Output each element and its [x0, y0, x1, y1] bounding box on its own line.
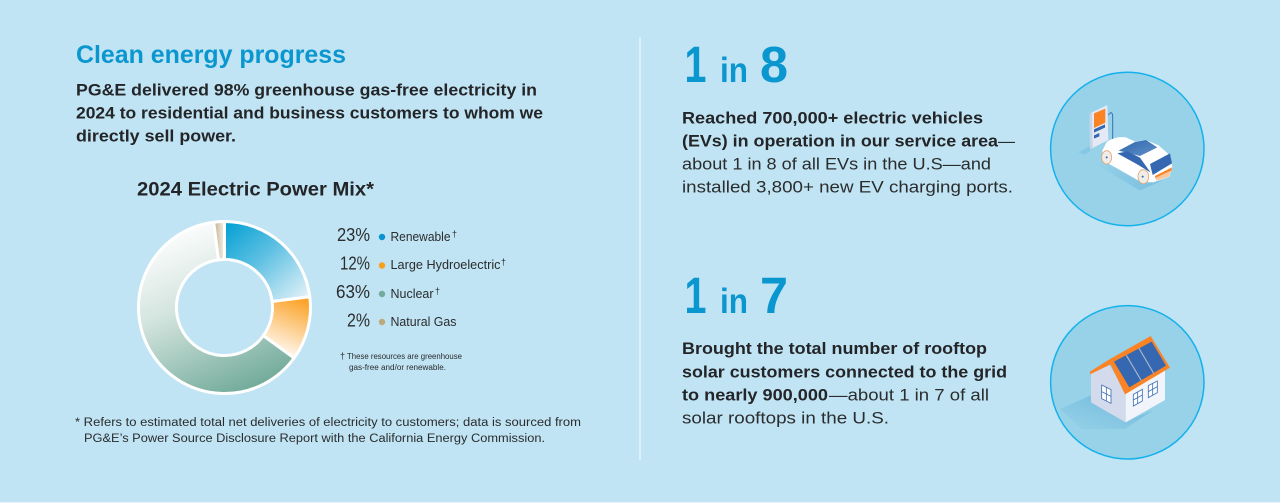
legend item: large hydroelectric: †: [501, 257, 506, 267]
EV text block: about 1 in 8 of all EVs in the U.S—and: [682, 154, 991, 174]
solar text block: [682, 339, 1007, 428]
intro text: directly sell power.: [76, 126, 236, 146]
heading: Clean energy progress: [76, 41, 346, 69]
legend item: renewable: †: [452, 229, 457, 239]
solar text block: solar customers connected to the grid: [682, 362, 1007, 382]
legend item: nuclear: †: [435, 286, 440, 296]
chart title: 2024 Electric Power Mix*: [137, 180, 375, 200]
legend item: nuclear: [336, 282, 440, 302]
legend footnote: †: [340, 351, 345, 361]
statistic: 1 in 8: 8: [760, 36, 788, 93]
statistic: 1 in 7: 1: [684, 267, 706, 324]
statistic: 1 in 7: 7: [760, 267, 788, 324]
legend item: natural gas: [347, 310, 456, 330]
statistic: 1 in 7: [684, 267, 788, 324]
legend item: natural gas: Natural Gas: [390, 315, 456, 329]
legend item: large hydroelectric: 12%: [340, 254, 370, 274]
panel: rooftop solar: [682, 267, 1204, 459]
statistic: 1 in 8: [684, 36, 788, 93]
panel: clean energy progress: [75, 41, 581, 445]
legend item: nuclear: 63%: [336, 282, 370, 302]
donut chart: electric power mix: [139, 222, 310, 394]
data source note: PG&E’s Power Source Disclosure Report with the California Energy Commission.: [84, 433, 545, 445]
legend footnote: These resources are greenhouse: [347, 352, 463, 361]
statistic: 1 in 8: 1: [684, 36, 706, 93]
segment: nuclear 63%: [139, 222, 294, 394]
intro text: [76, 80, 543, 146]
legend item: large hydroelectric: [340, 254, 506, 274]
legend item: natural gas: 2%: [347, 310, 370, 330]
legend footnote: [340, 351, 463, 372]
icon: house with solar panels: [1051, 306, 1204, 459]
solar text block: —about 1 in 7 of all: [829, 386, 989, 404]
EV text block: installed 3,800+ new EV charging ports.: [682, 178, 1013, 196]
solar text block: to nearly 900,000: [682, 386, 828, 404]
statistic: 1 in 8: in: [720, 51, 748, 90]
solar text block: solar rooftops in the U.S.: [682, 408, 889, 428]
legend item: large hydroelectric: Large Hydroelectric: [390, 258, 500, 272]
legend footnote: gas-free and/or renewable.: [349, 363, 446, 372]
segment: large hydroelectric 12%: [263, 297, 310, 358]
intro text: PG&E delivered 98% greenhouse gas-free electricity in: [76, 80, 537, 100]
panel: electric vehicles: [682, 36, 1204, 226]
segment: renewable 23%: [224, 222, 310, 302]
statistic: 1 in 7: in: [720, 282, 748, 321]
data source note: * Refers to estimated total net deliveries of electricity to customers; data is sourced from: [75, 417, 581, 429]
EV text block: —: [998, 132, 1015, 150]
EV text block: (EVs) in operation in our service area: [682, 132, 999, 150]
legend: [336, 225, 506, 330]
EV text block: Reached 700,000+ electric vehicles: [682, 108, 983, 128]
legend item: nuclear: Nuclear: [390, 287, 434, 301]
data source note: [75, 417, 581, 445]
EV text block: [682, 108, 1015, 196]
intro text: 2024 to residential and business customers to whom we: [76, 104, 543, 122]
solar text block: Brought the total number of rooftop: [682, 339, 987, 358]
legend item: renewable: Renewable: [390, 230, 451, 244]
legend item: renewable: 23%: [337, 225, 370, 245]
segment: natural gas 2%: [214, 222, 224, 260]
icon: electric car at charger: [1051, 72, 1204, 226]
legend item: renewable: [337, 225, 457, 245]
